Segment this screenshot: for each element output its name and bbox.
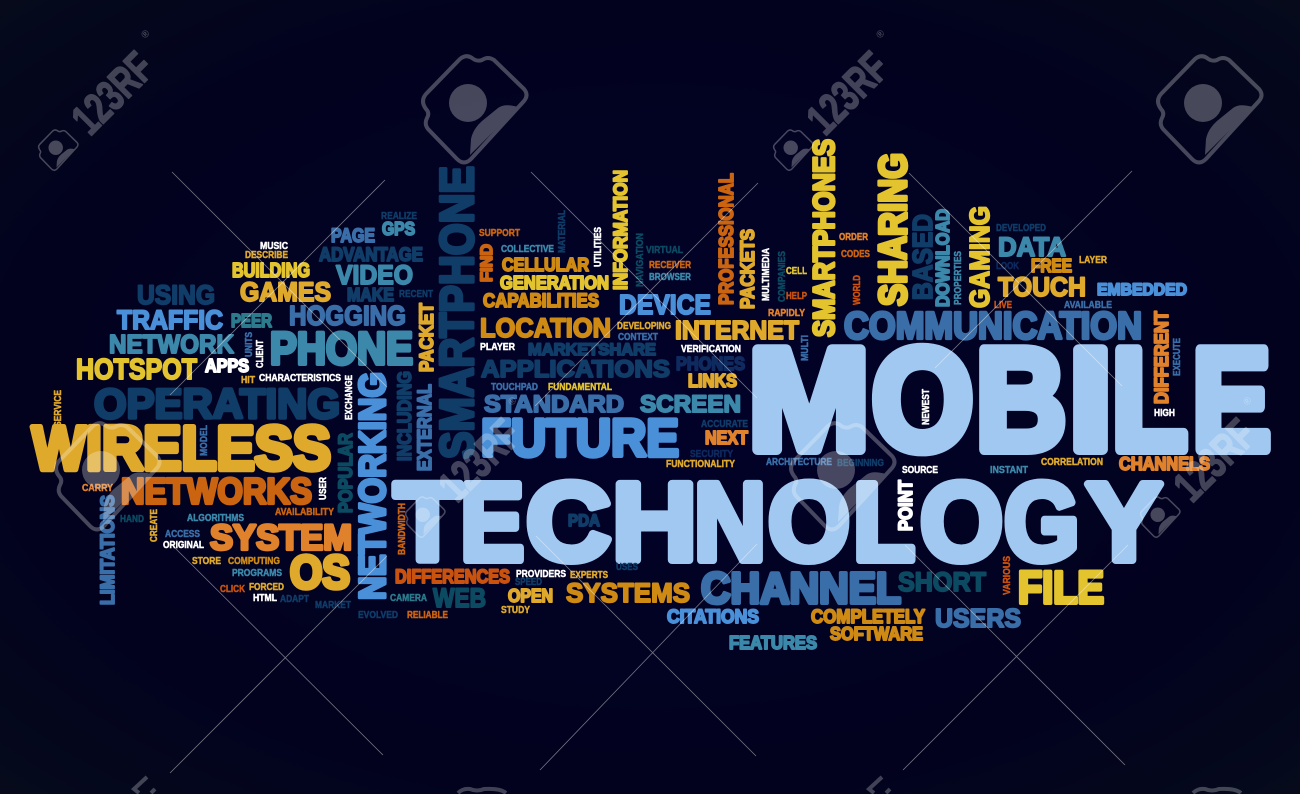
word: CHANNEL: CHANNEL — [701, 564, 901, 613]
word: MOBILE: B — [976, 318, 1066, 480]
small keywords: HIGH — [1154, 408, 1175, 419]
small keywords: CODES — [841, 249, 870, 260]
small keywords: HELP — [786, 291, 807, 302]
small keywords: COMPANIES — [777, 251, 788, 302]
small keywords: EXECUTE — [1172, 338, 1183, 376]
medium keywords: ADVANTAGE — [319, 245, 423, 266]
small keywords: BROWSER — [649, 272, 692, 283]
small keywords: ORIGINAL — [163, 540, 204, 551]
word: TECHNOLOGY: C — [526, 461, 611, 584]
word: COMMUNICATION: COMMUNICATION — [844, 306, 1142, 348]
small keywords: CORRELATION — [1041, 457, 1103, 468]
medium keywords: POPULAR — [336, 433, 357, 513]
small keywords: PROVIDERS — [516, 569, 566, 580]
small keywords: FUNCTIONALITY — [666, 459, 735, 470]
small keywords: LOOK — [996, 261, 1020, 272]
medium keywords: LIMITATIONS — [98, 495, 119, 605]
word: TECHNOLOGY: G — [1004, 461, 1080, 584]
medium keywords: APPS — [205, 356, 249, 376]
medium keywords: CELLULAR — [502, 255, 589, 275]
small keywords: MULTI — [800, 335, 811, 361]
small keywords: USER — [318, 476, 329, 500]
small keywords: HTML — [253, 593, 277, 604]
small keywords: MARKET — [315, 600, 351, 611]
small keywords: CLICK — [220, 584, 246, 595]
small keywords: DESCRIBE — [245, 250, 288, 261]
word: TECHNOLOGY: T — [394, 461, 461, 584]
small keywords: EVOLVED — [358, 610, 398, 621]
small keywords: LAYER — [1079, 255, 1108, 266]
small keywords: DEVELOPED — [996, 223, 1046, 234]
watermark: 123RF top centre — [774, 28, 899, 170]
medium keywords: INFORMATION — [611, 170, 632, 290]
word: TECHNOLOGY: Y — [1086, 461, 1162, 584]
word: MOBILE: E — [1192, 318, 1271, 480]
medium keywords: PACKET — [417, 303, 438, 372]
word: SMARTPHONE: SMARTPHONE — [430, 166, 483, 459]
small keywords: CHARACTERISTICS — [259, 373, 341, 384]
watermark: large camera icon middle left — [56, 423, 160, 530]
medium keywords: BUILDING — [232, 260, 310, 282]
medium keywords: STANDARD — [484, 391, 624, 418]
medium keywords: GAMES — [240, 277, 331, 307]
medium keywords: LINKS — [688, 371, 737, 391]
word: TECHNOLOGY: N — [694, 461, 766, 584]
word: FUTURE: FUTURE — [481, 409, 679, 468]
decorative watermark cross lines — [170, 171, 1132, 773]
small keywords: VARIOUS — [1002, 556, 1013, 595]
word: SMARTPHONES: SMARTPHONES — [808, 139, 841, 337]
small keywords: VIRTUAL — [646, 245, 683, 256]
word: TECHNOLOGY: L — [853, 461, 915, 584]
watermark: 123RF middle left — [406, 395, 531, 537]
medium keywords: USERS — [935, 603, 1021, 633]
word: OPERATING: OPERATING — [94, 380, 340, 427]
small keywords: ACCURATE — [701, 419, 748, 430]
medium keywords: COMPLETELY — [811, 607, 925, 628]
small keywords: UNITS — [244, 332, 255, 357]
watermark: large camera icon middle right — [791, 423, 894, 530]
small keywords: REALIZE — [381, 211, 417, 222]
word: OS: OS — [290, 546, 350, 598]
small keywords: MULTIMEDIA — [761, 248, 772, 301]
medium keywords: DIFFERENCES — [395, 567, 510, 588]
medium keywords: CITATIONS — [667, 607, 759, 628]
medium keywords: INCLUDING — [395, 371, 416, 461]
medium keywords: SYSTEMS — [566, 578, 690, 608]
medium keywords: SOFTWARE — [830, 624, 923, 644]
medium keywords: GPS — [382, 219, 415, 239]
medium keywords: DEVICE — [619, 289, 711, 320]
word: MOBILE: O — [872, 318, 974, 480]
small keywords: MUSIC — [260, 241, 288, 252]
small keywords: BANDWIDTH — [397, 503, 408, 555]
small keywords: SERVICE — [53, 390, 64, 427]
small keywords: NAVIGATION — [635, 233, 646, 287]
medium keywords: INTERNET — [675, 315, 799, 345]
small keywords: CELL — [786, 266, 807, 277]
medium keywords: GENERATION — [500, 273, 609, 293]
small keywords: WORLD — [852, 275, 863, 305]
small keywords: ORDER — [839, 232, 869, 243]
word cloud — [32, 139, 1271, 653]
medium keywords: POINT — [896, 480, 917, 531]
medium keywords: TOUCH — [998, 272, 1086, 302]
medium keywords: WEB — [433, 583, 486, 613]
small keywords: SPEED — [515, 577, 542, 588]
word: TECHNOLOGY: E — [460, 461, 524, 584]
small keywords: FUNDAMENTAL — [548, 382, 612, 393]
small keywords: UTILITIES — [593, 227, 604, 267]
medium keywords: DIFFERENT — [1152, 311, 1173, 404]
medium keywords: HOTSPOT — [76, 354, 197, 386]
medium keywords: PDA — [568, 511, 600, 530]
small keywords: AVAILABLE — [1064, 300, 1112, 311]
small keywords: USES — [616, 562, 638, 573]
medium keywords: TRAFFIC — [117, 305, 223, 335]
medium keywords: DATA — [998, 232, 1066, 262]
medium keywords: VIDEO — [336, 260, 413, 290]
word: NETWORKS: NETWORKS — [121, 470, 312, 512]
small keywords: MODEL — [199, 425, 210, 456]
medium keywords: PAGE — [331, 226, 375, 247]
medium keywords: APPLICATIONS — [481, 356, 670, 383]
small keywords: RECEIVER — [649, 260, 692, 271]
small keywords: SUPPORT — [479, 228, 520, 239]
small keywords: PLAYER — [480, 342, 516, 353]
medium keywords — [76, 170, 1210, 653]
word: WIRELESS: WIRELESS — [32, 414, 331, 484]
small keywords — [53, 210, 1183, 621]
small keywords: PROPERTIES — [953, 251, 964, 305]
small keywords: MATERIAL — [557, 210, 568, 253]
small keywords: CLIENT — [255, 340, 266, 368]
medium keywords: HOGGING — [289, 300, 406, 331]
small keywords: RAPIDLY — [768, 308, 805, 319]
medium keywords: EXTERNAL — [415, 384, 436, 471]
watermark: 123RF top left — [39, 28, 164, 170]
small keywords: LIVE — [994, 300, 1012, 311]
word: FILE: FILE — [1018, 562, 1104, 613]
word: SHARING: SHARING — [872, 153, 915, 306]
small keywords: NEWEST — [921, 389, 932, 425]
small keywords: STUDY — [501, 605, 530, 616]
word: TECHNOLOGY: H — [612, 461, 697, 584]
small keywords: TOUCHPAD — [491, 382, 538, 393]
word: SYSTEM: SYSTEM — [210, 518, 352, 558]
small keywords: COMPUTING — [228, 556, 280, 567]
small keywords: PROGRAMS — [232, 568, 282, 579]
medium keywords: SHORT — [898, 567, 986, 597]
small keywords: ACCESS — [165, 529, 200, 540]
medium keywords: USING — [137, 280, 215, 310]
medium keywords: LOCATION — [480, 313, 611, 343]
small keywords: AVAILABILITY — [275, 507, 334, 518]
medium keywords: MARKETSHARE — [528, 340, 656, 359]
medium keywords: PROFESSIONAL — [716, 173, 738, 305]
small keywords: ARCHITECTURE — [766, 457, 832, 468]
small keywords: CONTEXT — [618, 332, 658, 343]
small keywords: HIT — [241, 375, 255, 386]
small keywords: SOURCE — [902, 465, 938, 476]
small keywords: HAND — [120, 514, 144, 525]
word: NETWORKING: NETWORKING — [352, 372, 393, 600]
medium keywords: NETWORK — [109, 329, 234, 359]
word: MOBILE: L — [1112, 318, 1188, 480]
small keywords: CAMERA — [390, 593, 427, 604]
small keywords: INSTANT — [990, 465, 1028, 476]
medium keywords: BASED — [907, 214, 938, 300]
medium keywords: FIND — [477, 244, 496, 282]
medium keywords: CAPABILITIES — [483, 291, 599, 312]
small keywords: VERIFICATION — [681, 344, 741, 355]
small keywords: RECENT — [399, 289, 433, 300]
small keywords: FORCED — [249, 582, 284, 593]
watermark: large camera icon top right — [1158, 56, 1262, 162]
medium keywords: NEXT — [705, 428, 748, 448]
watermark: large camera icon top centre — [423, 56, 526, 162]
small keywords: DEVELOPING — [617, 321, 671, 332]
medium keywords: PACKETS — [738, 229, 759, 309]
small keywords: RELIABLE — [407, 610, 448, 621]
word: MOBILE: I — [1068, 318, 1112, 480]
watermark fragments cut off by the bottom edge — [134, 777, 1241, 793]
medium keywords: OPEN — [508, 586, 553, 606]
small keywords: CARRY — [82, 483, 113, 494]
medium keywords: FEATURES — [729, 633, 817, 653]
small keywords: STORE — [192, 556, 221, 567]
medium keywords: DOWNLOAD — [933, 209, 953, 307]
medium keywords: FREE — [1031, 256, 1072, 276]
small keywords: CREATE — [149, 509, 160, 542]
small keywords: EXPERTS — [570, 570, 608, 581]
small keywords: COLLECTIVE — [501, 244, 554, 255]
word: MOBILE: M — [748, 318, 870, 480]
medium keywords: SCREEN — [640, 391, 741, 418]
medium keywords: MAKE — [347, 285, 394, 305]
small keywords: ADAPT — [280, 594, 309, 605]
watermark: 123RF middle right — [1141, 395, 1266, 537]
medium keywords: PHONES — [676, 354, 745, 374]
word: TECHNOLOGY: O — [920, 461, 1003, 584]
small keywords: EXCHANGE — [344, 375, 355, 420]
medium keywords: GAMING — [964, 206, 995, 308]
small keywords: BEGINNING — [837, 458, 884, 469]
small keywords: ALGORITHMS — [187, 513, 244, 524]
small keywords: SECURITY — [690, 449, 733, 460]
medium keywords: EMBEDDED — [1097, 280, 1187, 299]
word: TECHNOLOGY: O — [768, 461, 850, 584]
word: PHONE: PHONE — [270, 323, 413, 374]
medium keywords: CHANNELS — [1119, 454, 1210, 474]
medium keywords: PEER — [231, 311, 272, 331]
